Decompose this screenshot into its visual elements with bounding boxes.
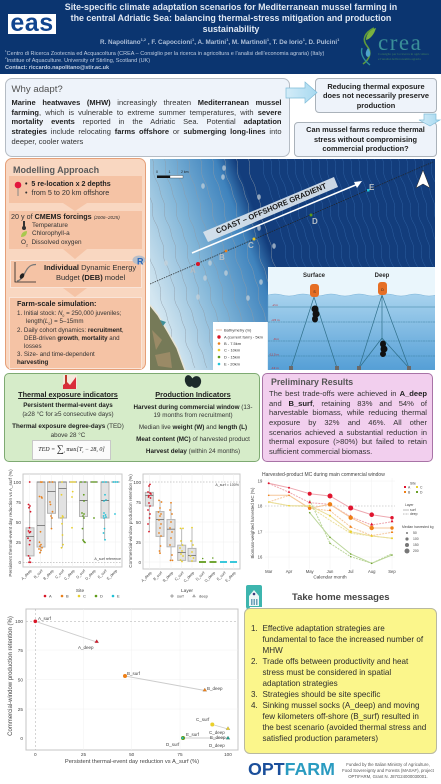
section: thermal exposure indicators: (≥28 °C for ≥5 consecutive days) [22,410,114,418]
chart: harvested-product MC line chart: 18 [258,504,263,508]
chart: production retention boxplot: A_surf = 100% [215,483,240,487]
chart: thermal-event reduction boxplot: C_deep [63,569,76,581]
logo: CREA [360,27,429,66]
legend: line chart [402,482,434,554]
icon: thermal stress [63,375,77,389]
legend: map: D - 15km [224,354,241,360]
chart: harvested-product MC line chart: Apr [286,569,293,574]
chart: thermal-event reduction boxplot: C [83,594,86,598]
icon: mussels [184,375,202,388]
chart: thermal-event reduction boxplot: D [100,594,103,598]
chart: harvested-product MC line chart: Aug [368,569,376,574]
step: CMEMS forcings: 20 y of CMEMS forcings (2006–2025) [11,212,120,221]
legend: map [213,322,269,370]
chart: harvested-product MC line chart: 19 [258,478,263,484]
text: funding statement: Food Sovereignty and Forests (MASAF), project [342,768,434,773]
chart: harvested-product MC line chart: Calendar month [313,574,347,580]
chart: trade-off scatter: 25 [18,707,23,712]
arrow: why adapt to reducing exposure [286,82,317,103]
affiliations: 2Institue of Aquaculture. University of Stirling, Scotland (UK) [5,56,150,64]
legend: line chart: A [408,486,411,490]
chart: production retention boxplot: B_deep [162,571,174,583]
callout: reducing thermal exposure [315,78,437,113]
chart: thermal-event reduction boxplot: E_surf [97,568,108,579]
panel: take home messages: Sinking mussel socks (A_deep) and moving [262,701,420,710]
inset: surface and deep longlines: Surface [303,273,326,279]
panel: modelling approach [5,158,146,370]
chart: trade-off scatter: 75 [18,648,23,653]
panel: take home messages: 4. [251,701,258,710]
chart: trade-off scatter: Commercial-window production retention (%) [8,616,14,736]
chart: production retention boxplot: C_deep [183,571,195,583]
text: results body [269,389,427,456]
affiliations: Contact: riccardo.napolitano@stir.ac.uk [5,65,109,71]
text: funding statement [342,762,434,779]
step: farm-scale simulation: 2. Daily cohort dynamics: recruitment, [17,327,124,334]
legend: line chart: 50 [413,531,417,535]
chart: production retention boxplot: 0 [138,560,141,565]
inset: surface and deep longlines: -2 m [272,303,279,307]
chart: trade-off scatter: 50 [18,678,23,682]
panel: take home messages: 3. [251,690,258,699]
text: why adapt body: deeper, cooler waters [12,137,83,146]
chart: production retention boxplot: E_surf [216,570,227,581]
section: production indicators: Harvest during commercial window (13- [134,404,252,410]
step: relocation: • 5 re-location x 2 depths [25,180,111,188]
section: production indicators: Harvest delay (within 24 months) [146,448,240,455]
chart: thermal-event reduction boxplot: A_surf reference [94,557,121,561]
chart: trade-off scatter [8,609,238,765]
legend: map: C - 10km [224,348,241,352]
chart: trade-off scatter: 25 [81,752,86,757]
chart: production retention boxplot: 25 [136,540,141,545]
step: farm-scale simulation: DEB-driven growth, mortality and [24,335,120,342]
chart: trade-off scatter: A_deep [78,645,94,650]
panel: take home messages: Effective adaptation strategies are [262,624,385,633]
chart: production retention boxplot: A_deep [141,571,153,583]
chart: trade-off scatter: D_surf [166,742,180,747]
section: thermal exposure indicators: Persistent thermal-event days [23,402,113,409]
legend: line chart: Site [410,482,416,486]
text: why adapt body: mortality events reported in the Adriatic Sea. Potential adaptation [12,117,282,126]
chart: trade-off scatter: Persistent thermal-event day reduction vs A_surf (%) [65,759,199,765]
legend: map: Bathymetry (m) [224,328,252,332]
section: production indicators [134,390,252,455]
step: farm-scale simulation [9,297,142,369]
arrow: chevron 3 [63,288,87,297]
step: CMEMS forcings [9,211,142,249]
chart: production retention boxplot: 50 [136,520,141,525]
legend: line chart: 200 [413,549,419,553]
formula: TED [32,440,111,460]
text: results body: harvestable biomass, while reducing thermal [269,408,427,417]
chart: production retention boxplot: D_deep [204,571,216,583]
panel: take home messages: Strategies should be site specific [262,690,380,699]
section: thermal exposure indicators: Thermal exposure indicators [18,390,118,399]
affiliations: 1Centro di Ricerca Zootecnia ed Acquacoltura (CREA – Consiglio per la ricerca in agricoltura e l’analisi dell’economia agraria) (Italy) [5,49,324,57]
step: farm-scale simulation: 1. Initial stock: N0 = 250,000 juveniles; [17,310,121,318]
map: study area [150,159,435,370]
chart: thermal-event reduction boxplot: 100 [13,480,21,485]
chart: thermal-event reduction boxplot: D_surf [75,568,87,580]
chart: harvested-product MC line chart: Sep [388,569,396,574]
arrow: chevron 1 [63,203,87,211]
text: funding statement: Funded by the Italian Ministry of Agriculture, [346,762,430,767]
site markers: C [248,241,254,250]
chart: harvested-product MC line chart [250,472,434,580]
chart: trade-off scatter: B_surf [127,671,141,676]
chart: harvested-product MC line chart: May [306,569,315,574]
chart: production retention boxplot: Layer [181,588,193,594]
chart: trade-off scatter: A_surf [38,616,52,621]
text: why adapt body: Marine heatwaves (MHW) increasingly threaten Mediterranean mussel [12,98,282,107]
step: farm-scale simulation: losses [24,343,42,350]
site markers: B [219,253,225,262]
icon: thermometer [22,221,26,230]
panel: take home messages: satisfied production parameters) [262,734,378,743]
chart: trade-off scatter: D_deep [209,743,225,748]
panel: take home messages: fundamental to face the increased number of [262,635,423,644]
authors: R. Napolitano1,2 , F. Capoccioni1, A. Martini1, M. Martinoli1, T. De Iorio1, D. Pulcini1 [100,37,339,46]
site markers: E [369,183,375,192]
step: relocation [9,176,142,203]
logo: CREA: crea [378,30,422,55]
legend: line chart: Layer [405,503,414,507]
inset: surface and deep longlines: Deep [375,273,390,279]
inset: surface and deep longlines: D [381,288,384,292]
site markers: D [312,217,318,226]
callout: research question: commercial production? [322,144,409,153]
icon: chlorophyll [21,231,27,237]
panel: thermal and production indicators [4,373,260,462]
chart: thermal-event reduction boxplot: D_deep [84,569,97,581]
text: why adapt body: farming, which is vulnerable to extreme summer temperatures, with severe [12,108,282,117]
chart: trade-off scatter: C_deep [209,730,225,735]
icon: R logo [132,256,146,266]
panel: take home messages: 2. [251,657,258,666]
inset: surface and deep longlines: -9 m [273,337,280,341]
step: DEB model: Budget (DEB) model [56,273,125,282]
formula: TED: TED = ∑t max[Tt − 28, 0] [38,444,105,455]
banner: coast offshore gradient [192,177,362,253]
chart: harvested-product MC line chart: 16 [258,554,263,560]
chart: harvested-product MC line chart: Jul [348,569,353,574]
heading: modelling approach: Modelling Approach [13,165,99,175]
legend: line chart: Median harvested kg [402,525,434,529]
chart: production retention boxplot: 75 [136,500,141,505]
chart: thermal-event reduction boxplot: Site [76,588,84,594]
step: DEB model [10,260,142,288]
legend: map: A (current farm) - 5km [224,334,264,340]
chart: trade-off scatter: E_surf [186,732,200,737]
text: results body: scenarios achieved a substantial reduction in [269,428,427,437]
section: production indicators: 19 months from recruitment) [153,412,233,419]
callout: reducing thermal exposure: production [357,101,395,110]
chart: thermal-event reduction boxplot: B [66,594,69,598]
legend: line chart: deep [410,512,418,516]
arrow: down to research question [419,114,440,126]
panel: take home messages: the best scenario (avoided thermal stress and [262,723,426,732]
north arrow [416,170,430,188]
legend: line chart: 150 [413,543,419,547]
chart: production retention boxplot: C_surf [174,570,185,582]
text: why adapt body [12,98,282,146]
chart: trade-off scatter: C_surf [196,717,210,722]
text: results body: and B_surf, retaining 83% and 54% of [269,399,427,408]
panel: take home messages: MHW [262,646,283,655]
chart: production retention boxplot: deep [199,594,209,598]
logo: OPTFARM: OPTFARM [248,759,335,779]
legend: line chart: B [408,490,411,494]
legend: line chart: 100 [413,537,419,541]
text: funding statement: OPTIFARM, Grant N. J87G24000030001. [348,774,428,779]
title: sustainability [203,24,259,34]
title [65,2,397,34]
chart: harvested-product MC line chart: Jun [327,569,334,574]
callout: reducing thermal exposure: does not necessarily preserve [323,91,429,100]
chart: trade-off scatter: B_deep [207,686,223,691]
chart: thermal-event reduction boxplot: 75 [16,500,21,505]
text: results body: thermal exposure (>80%) but failed to retain [269,437,427,446]
panel: preliminary results [262,373,433,462]
chart: trade-off scatter: 75 [177,752,183,757]
chart: thermal-event reduction boxplot: E_deep [106,569,118,581]
header banner [0,0,441,74]
legend: map: B - 7.5km [224,341,242,346]
panel: why adapt [5,78,290,157]
panel: take home messages: Trade offs between productivity and heat [262,657,408,666]
affiliations [5,49,324,71]
callout: research question: Can mussel farms reduce thermal [306,125,425,134]
panel: take home messages: few kilometers off-shore (B_surf) resulted in [262,712,419,721]
title: the central Adriatic Sea: balancing thermal-stress mitigation and production [71,13,391,23]
step: CMEMS forcings: Temperature [32,222,68,229]
legend: line chart: D [420,490,423,494]
heading: take home messages: Take home messages [292,592,390,603]
scale bar: 2 km [181,170,189,174]
legend: line chart: surf [410,508,416,512]
chart: thermal-event reduction boxplot [8,469,122,598]
step: farm-scale simulation: 3. Size- and time-dependent [17,351,95,358]
chart: trade-off scatter: 0 [20,736,23,741]
chart: trade-off scatter: 100 [15,619,23,624]
chart: harvested-product MC line chart: 17 [258,530,263,534]
icon: take-home house [246,585,262,609]
step: farm-scale simulation: harvesting [17,359,48,366]
step: farm-scale simulation: length(L0) = 5–15mm [26,318,84,326]
chart: thermal-event reduction boxplot: C_surf [54,568,66,580]
scale bar: 0 [156,170,158,174]
inset: surface and deep longlines: S [313,290,316,294]
chart: thermal-event reduction boxplot: E [117,594,120,598]
text: why adapt body: strategies include relocating farms offshore or submerging long-lines into [12,127,282,136]
title: Site-specific climate adaptation scenarios for Mediterranean mussel farming in [65,2,397,12]
inset: surface and deep longlines: -13 m [271,366,279,370]
banner: coast offshore gradient: COAST – OFFSHORE GRADIENT [215,181,328,236]
chart: harvested-product MC line chart: Mar [265,569,273,574]
chart: production retention boxplot: Commercial-window production retention (%) [128,474,133,568]
chart: thermal-event reduction boxplot: B_surf [33,568,44,579]
chart: production retention boxplot: D_surf [195,570,206,582]
chart: thermal-event reduction boxplot: 25 [16,540,21,545]
chart: thermal-event reduction boxplot: B_deep [43,569,55,581]
section: thermal exposure indicators: Thermal exposure degree-days (TED) [12,423,124,430]
icon: map pin [14,182,22,196]
callout: research question: stress without compromising [314,135,417,144]
heading: why adapt: Why adapt? [12,84,63,95]
text: results body: exposure by 32% and 46%. All other [269,418,427,427]
legend: map: E - 20km [224,362,241,366]
panel: take home messages: adaptation strategies [262,679,338,688]
callout: reducing thermal exposure: Reducing thermal exposure [327,82,425,90]
icon: growth curve [14,262,36,282]
legend: line chart: C [420,486,423,490]
chart: trade-off scatter: E_deep [210,735,226,740]
section: production indicators: Median live weight (W) and length (L) [139,424,247,430]
step: DEB model: Individual Dynamic Energy [44,263,136,272]
site markers: A [190,266,196,275]
panel: take home messages: stress must be considered in spatial [262,668,391,677]
chart: production retention boxplot [128,474,240,598]
site markers [190,183,375,275]
chart: trade-off scatter: 50 [129,752,135,757]
chart: thermal-event reduction boxplot: 50 [16,520,21,525]
section: thermal exposure indicators [12,390,124,460]
section: thermal exposure indicators: above 28 °C [51,432,85,438]
arrow: chevron 2 [63,249,87,259]
panel: take home messages [244,608,437,754]
heading: preliminary results: Preliminary Results [271,377,353,387]
text: results body: The best trade-offs were achieved in A_deep [269,389,427,398]
chart: trade-off scatter: 100 [224,752,232,757]
transect line [150,162,433,284]
scale bar [156,170,189,178]
chart: thermal-event reduction boxplot: 0 [18,560,21,565]
step: CMEMS forcings: O2 Dissolved oxygen [21,239,82,247]
chart: thermal-event reduction boxplot: Persistent thermal-event day reduction vs A_surf (%) [8,469,13,577]
callout: research question [294,122,437,157]
chart: production retention boxplot: surf [177,594,185,598]
chart: production retention boxplot: 100 [133,480,141,485]
chart: harvested-product MC line chart: Harvested-product MC during main commercial window [262,472,385,478]
chart: production retention boxplot: E_deep [225,571,237,583]
chart: thermal-event reduction boxplot: A [49,594,52,598]
chart: trade-off scatter: 0 [34,752,37,757]
step: farm-scale simulation: Farm-scale simulation: [17,299,96,308]
scale bar: 1 [168,170,170,174]
inset: surface and deep longlines [268,267,436,370]
chart: production retention boxplot: B_surf [153,570,164,581]
inset: surface and deep longlines: -11.5 m [269,352,279,356]
logo: CREA: e l'analisi dell'economia agraria [378,57,421,61]
chart: thermal-event reduction boxplot: A_deep [21,569,33,581]
step: relocation: • from 5 to 20 km offshore [25,188,109,197]
text: results body: sufficient commercial biomass. [269,447,372,456]
panel: take home messages: 1. [251,624,258,633]
step: CMEMS forcings: Chlorophyll-a [32,230,70,237]
logo: CREA: Consiglio per la ricerca in agricoltura [378,52,429,56]
inset: surface and deep longlines: -4.5 m [271,318,280,322]
chart: harvested-product MC line chart: Biomass-weighted harvested MC (%) [250,487,255,558]
section: production indicators: Production Indicators [155,390,231,399]
section: production indicators: Meat content (MC) of harvested product [136,436,250,443]
